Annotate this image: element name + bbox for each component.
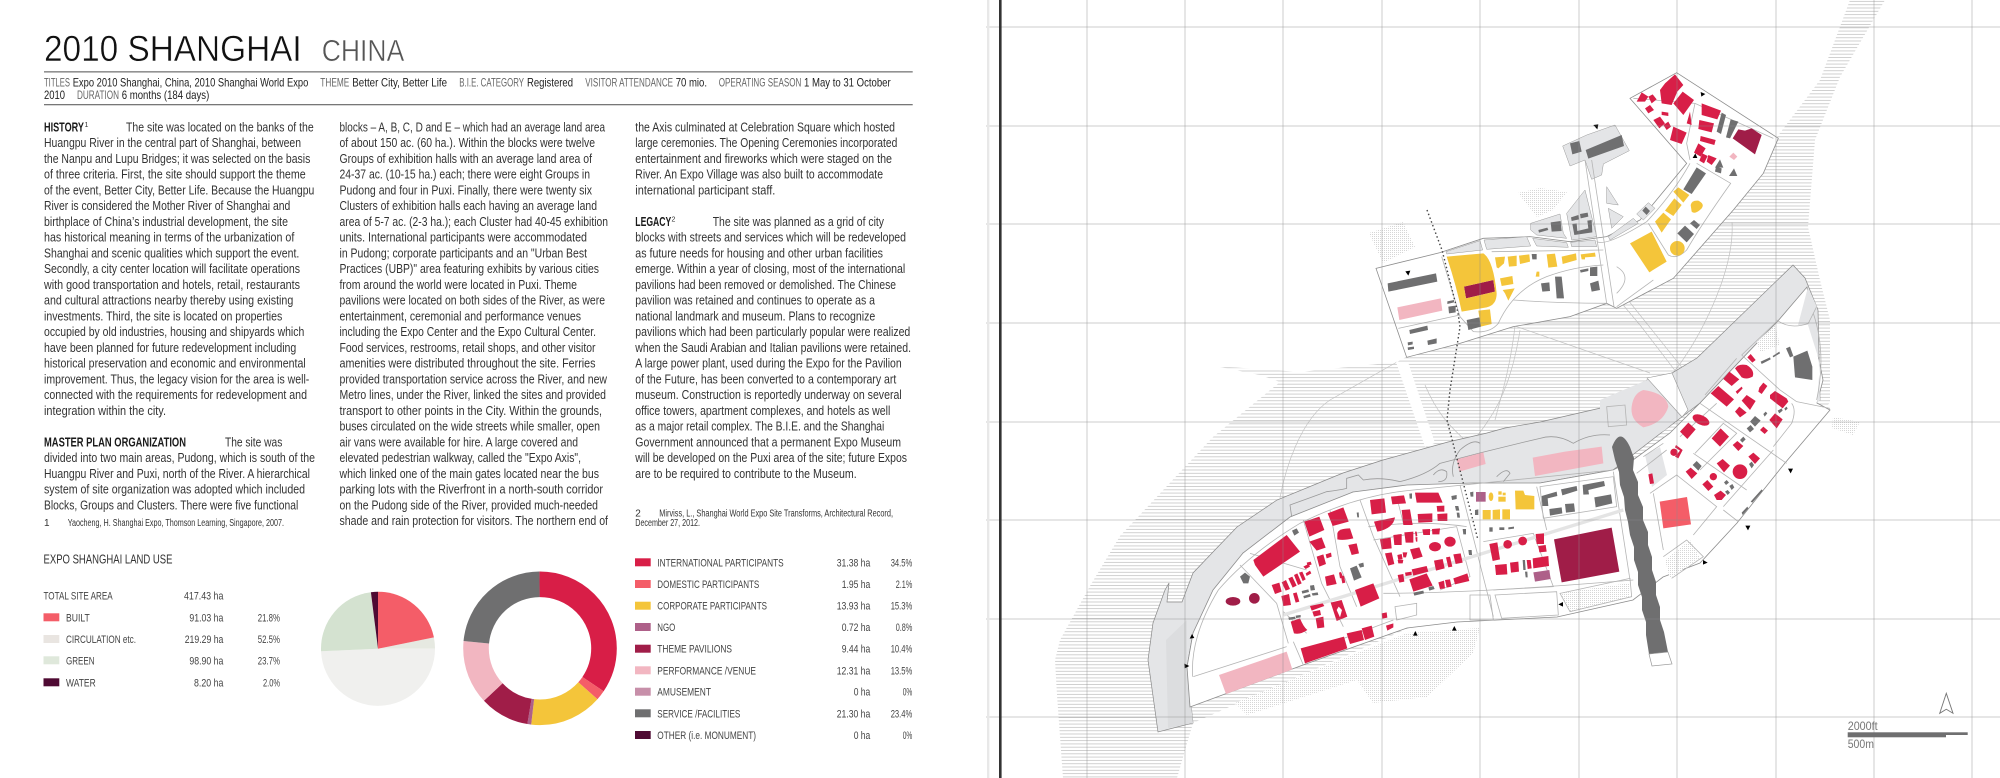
- legend row: theme pavilions: 10.4%: [891, 644, 913, 656]
- stipple on Pudong land: [1560, 325, 1780, 612]
- east red pavilions: [1648, 354, 1788, 500]
- land use table: 417.43 ha: [184, 591, 223, 603]
- text column 3: master plan end and legacy: will be developed on the Puxi area of the site; future Expos: [634, 451, 907, 465]
- text column 2: master plan continued: pavilions were located on both sides of the River, as were: [340, 294, 605, 308]
- text column 1: history and master plan organization: of three criteria. First, the site should support the theme: [44, 168, 306, 182]
- text column 2: master plan continued: area of 5-7 ac. (2-3 ha.); each Cluster had 40-45 exhibition: [340, 215, 608, 229]
- Puxi service buildings: [1388, 113, 1738, 350]
- row: green: 98.90 ha: [189, 655, 223, 667]
- text column 3: master plan end and legacy: LEGACY: [635, 215, 672, 229]
- row: circulation: 52.5%: [258, 634, 280, 646]
- legend row: theme pavilions: [635, 644, 913, 656]
- text column 2: master plan continued: Metro lines, under the River, linked the sites and provided: [340, 388, 606, 402]
- legend row: service facilities: 21.30 ha: [837, 708, 870, 720]
- text column 3: master plan end and legacy: national landmark and museum. Plans to recognize: [635, 309, 875, 323]
- Pudong west buildings: [1184, 435, 1633, 694]
- legend row: NGO: 0.72 ha: [842, 622, 870, 634]
- text column 3: master plan end and legacy: pavilions which had been particularly popular were realized: [635, 325, 910, 339]
- Puxi theme pavilions: [1464, 128, 1762, 298]
- text column 3: master plan end and legacy: the Axis culminated at Celebration Square which hosted: [635, 120, 895, 134]
- row: green: GREEN: [66, 655, 94, 667]
- text column 1: history and master plan organization: birthplace of China’s industrial development, the site: [44, 215, 288, 229]
- Expo Axis: [1612, 436, 1668, 654]
- metadata strip: 2010: [44, 89, 65, 102]
- text column 2: master plan continued: Groups of exhibition halls with an average land area of: [340, 152, 592, 166]
- Puxi gate arrows: [1405, 92, 1705, 276]
- legend row: amusement: 0 ha: [854, 687, 870, 699]
- heading: land use: EXPO SHANGHAI LAND USE: [44, 552, 172, 566]
- text column 1: history and master plan organization: has historical meaning in terms of the urbanization of: [44, 231, 295, 245]
- legend row: theme pavilions: 9.44 ha: [842, 644, 870, 656]
- grid lines: [986, 0, 2000, 778]
- text column 3: master plan end and legacy: 2: [672, 216, 676, 224]
- metadata strip: B.I.E. CATEGORY: [459, 77, 524, 90]
- dotted Expo axis line: [1427, 210, 1478, 540]
- Pudong land: [1187, 287, 1830, 707]
- legend row: other: [635, 730, 913, 742]
- text column 2: master plan continued: of about 150 ac. (60 ha.). Within the blocks were twelve: [340, 136, 595, 150]
- donut chart: built area breakdown: [476, 584, 604, 712]
- legend row: performance venue: 12.31 ha: [837, 665, 870, 677]
- text column 3: master plan end and legacy: large ceremonies. The Opening Ceremonies incorporated: [635, 136, 897, 150]
- metadata strip: TITLES: [44, 77, 70, 90]
- text column 2: master plan continued: [339, 120, 608, 528]
- metadata strip: VISITOR ATTENDANCE: [585, 77, 673, 90]
- text column 3: master plan end and legacy: international participant staff.: [635, 184, 775, 198]
- legend row: other: 0%: [903, 730, 913, 742]
- text column 3: master plan end and legacy: River. An Expo Village was also built to accommodate: [635, 168, 883, 182]
- scale bar: 500m: [1848, 737, 1874, 751]
- Puxi land and buildings: [1376, 73, 1778, 357]
- legend row: performance venue: PERFORMANCE /VENUE: [657, 665, 756, 677]
- text column 2: master plan continued: on the Pudong side of the River, provided much-needed: [340, 498, 598, 512]
- text column 2: master plan continued: blocks – A, B, C, D and E – which had an average land area: [340, 120, 605, 134]
- legend row: international: 34.5%: [891, 557, 913, 569]
- legend row: amusement: [635, 687, 913, 699]
- legend row: amusement: AMUSEMENT: [657, 687, 711, 699]
- river hatching: [1055, 0, 1885, 778]
- legend row: NGO: 0.8%: [896, 622, 913, 634]
- footnote 2: Mirviss, L., Shanghai World Expo Site Transforms, Architectural Record,: [659, 508, 893, 520]
- Puxi grey plots: [1446, 125, 1655, 254]
- legend row: corporate: [635, 601, 913, 613]
- text column 1: history and master plan organization: divided into two main areas, Pudong, which is south of the: [44, 451, 315, 465]
- legend row: service facilities: 23.4%: [891, 708, 913, 720]
- legend row: theme pavilions: THEME PAVILIONS: [657, 644, 732, 656]
- legend row: international: [635, 557, 913, 569]
- legend row: international: INTERNATIONAL PARTICIPANTS: [657, 557, 784, 569]
- title: 2010 Shanghai China: CHINA: [322, 34, 405, 68]
- text column 1: history and master plan organization: River is considered the Mother River of Shanghai and: [44, 199, 290, 213]
- legend row: corporate: 13.93 ha: [837, 601, 870, 613]
- row: green: 23.7%: [258, 655, 280, 667]
- scale bar: [1848, 719, 1968, 751]
- row: circulation: 219.29 ha: [185, 634, 223, 646]
- text column 2: master plan continued: 24-37 ac. (10-15 ha.) each; there were eight Groups in: [340, 168, 590, 182]
- text column 3: master plan end and legacy: of the Future, has been converted to a contemporary art: [635, 372, 897, 386]
- white notch pier: [1647, 373, 1688, 417]
- text column 3: master plan end and legacy: Government announced that a permanent Expo Museum: [635, 435, 901, 449]
- text column 1: history and master plan organization: 1: [84, 122, 88, 129]
- footnote 1: [44, 518, 284, 529]
- text column 2: master plan continued: elevated pedestrian walkway, called the "Expo Axis",: [340, 451, 581, 465]
- text column 2: master plan continued: which linked one of the main gates located near the bus: [339, 467, 599, 481]
- text column 1: history and master plan organization: integration within the city.: [44, 404, 166, 418]
- metadata strip: OPERATING SEASON: [719, 77, 801, 90]
- metadata strip: THEME: [320, 77, 349, 90]
- north arrow: [1940, 693, 1953, 713]
- text column 2: master plan continued: units. International participants were accommodated: [340, 231, 587, 245]
- east service buildings: [1693, 347, 1812, 515]
- UBP corporate pavilions: [1483, 491, 1534, 519]
- legend row: domestic: 2.1%: [896, 579, 913, 591]
- row: built: BUILT: [66, 612, 90, 624]
- text column 1: history and master plan organization: investments. Third, the site is located on properties: [44, 309, 282, 323]
- stipple zones: [1235, 188, 1860, 715]
- legend row: corporate: CORPORATE PARTICIPANTS: [657, 601, 767, 613]
- legend row: international: 31.38 ha: [837, 557, 870, 569]
- Puxi red pavilions: [1637, 74, 1721, 165]
- Pudong service buildings: [1240, 481, 1612, 620]
- Pudong east buildings: [1607, 307, 1830, 578]
- text column 3: master plan end and legacy: office towers, apartment complexes, and hotels as well: [635, 404, 890, 418]
- row: water: WATER: [66, 677, 96, 689]
- metadata strip: 1 May to 31 October: [804, 77, 891, 90]
- legend row: performance venue: [635, 665, 913, 677]
- river crossing strip: [1396, 362, 1435, 447]
- metadata strip: Registered: [527, 77, 573, 90]
- text column 3: master plan end and legacy: pavilion was retained and continues to operate as a: [635, 294, 875, 308]
- text column 1: history and master plan organization: Huangpu River in the central part of Shanghai, between: [44, 136, 301, 150]
- text column 1: history and master plan organization: The site was located on the banks of the: [126, 120, 314, 134]
- text column 1: history and master plan organization: MASTER PLAN ORGANIZATION: [44, 435, 186, 449]
- text column 3: master plan end and legacy: are to be required to contribute to the Museum.: [635, 467, 857, 481]
- text column 3: master plan end and legacy: The site was planned as a grid of city: [713, 215, 885, 229]
- pie chart: site land use: [321, 592, 435, 706]
- bridges and thin arcs in the river: [1280, 222, 1732, 498]
- text column 1: history and master plan organization: have been planned for future redevelopment including: [44, 341, 296, 355]
- land use table: TOTAL SITE AREA: [44, 591, 113, 603]
- text column 1: history and master plan organization: of the event, Better City, Better Life. Because the Huangpu: [44, 184, 314, 198]
- row: water: 8.20 ha: [194, 677, 223, 689]
- text column 2: master plan continued: provided transportation service across the River, and new: [340, 372, 608, 386]
- Puxi performance venues: [1397, 153, 1737, 320]
- text column 1: history and master plan organization: Secondly, a city center location will facilitate operations: [44, 262, 300, 276]
- text column 2: master plan continued: Pudong and four in Puxi. Finally, there were twenty six: [340, 184, 593, 198]
- legend row: domestic: DOMESTIC PARTICIPANTS: [657, 579, 759, 591]
- text column 1: history and master plan organization: connected with the requirements for redevelopment and: [44, 388, 307, 402]
- text column 3: master plan end and legacy: emerge. Within a year of closing, most of the international: [635, 262, 905, 276]
- east gate arrows: [1703, 469, 1793, 565]
- footnote 2: 2: [635, 508, 641, 520]
- text column 1: history and master plan organization: [43, 120, 315, 512]
- legend row: performance venue: 13.5%: [891, 665, 913, 677]
- text column 3: master plan end and legacy: pavilions had been removed or demolished. The Chinese: [635, 278, 896, 292]
- metadata strip: 70 mio.: [676, 77, 707, 90]
- Puxi land: [1376, 73, 1778, 357]
- Pudong riverside band: [1148, 265, 1820, 732]
- text column 1: history and master plan organization: The site was: [225, 435, 282, 449]
- text column 3: master plan end and legacy: when the Saudi Arabian and Italian pavilions were retained.: [634, 341, 911, 355]
- text column 1: history and master plan organization: system of site organization was adopted which included: [44, 482, 305, 496]
- text column 1: history and master plan organization: with good transportation and hotels, retail, restaurants: [43, 278, 300, 292]
- footnote 2: [635, 508, 893, 529]
- text column 2: master plan continued: entertainment, ceremonial and performance venues: [340, 309, 581, 323]
- legend row: NGO: [635, 622, 913, 634]
- legend row: other: OTHER (i.e. MONUMENT): [657, 730, 756, 742]
- row: circulation: CIRCULATION etc.: [66, 634, 136, 646]
- legend row: service facilities: [635, 708, 913, 720]
- legend row: service facilities: SERVICE /FACILITIES: [657, 708, 740, 720]
- legend row: domestic: [635, 579, 913, 591]
- text column 3: master plan end and legacy: A large power plant, used during the Expo for the Pavilion: [635, 357, 902, 371]
- text column 3: master plan end and legacy: as future needs for housing and other urban facilities: [635, 246, 883, 260]
- text column 3: master plan end and legacy: [634, 120, 911, 481]
- text column 2: master plan continued: including the Expo Center and the Expo Cultural Center.: [340, 325, 596, 339]
- text column 3: master plan end and legacy: as a major retail complex. The B.I.E. and the Shanghai: [635, 420, 884, 434]
- text column 2: master plan continued: buses circulated on the wide streets while smaller, open: [340, 420, 600, 434]
- metadata strip: 6 months (184 days): [122, 89, 209, 102]
- footnote 1: Yaocheng, H. Shanghai Expo, Thomson Learning, Singapore, 2007.: [68, 518, 284, 529]
- metadata strip: [44, 71, 913, 105]
- text column 1: history and master plan organization: Blocks, Groups and Clusters. There were five functional: [44, 498, 298, 512]
- scale bar: 2000ft: [1848, 719, 1878, 733]
- text column 1: history and master plan organization: and cultural attractions nearby thereby using existing: [44, 294, 293, 308]
- text column 1: history and master plan organization: HISTORY: [44, 120, 84, 134]
- text column 2: master plan continued: transport to other points in the City. Within the grounds,: [340, 404, 602, 418]
- land use table: [44, 591, 280, 689]
- text column 3: master plan end and legacy: museum. Construction is reportedly underway on several: [635, 388, 902, 402]
- metadata strip: Expo 2010 Shanghai, China, 2010 Shanghai World Expo: [73, 77, 308, 90]
- legend row: NGO: NGO: [657, 622, 675, 634]
- row: water: 2.0%: [263, 677, 280, 689]
- text column 2: master plan continued: in Pudong; corporate participants and an "Urban Best: [340, 246, 587, 260]
- legend row: domestic: 1.95 ha: [842, 579, 870, 591]
- Puxi road lines: [1398, 98, 1773, 332]
- row: built: 21.8%: [258, 612, 280, 624]
- text column 2: master plan continued: Food services, restrooms, retail shops, and other visitor: [340, 341, 596, 355]
- boulevard stipple: [1283, 510, 1623, 615]
- legend row: other: 0 ha: [854, 730, 870, 742]
- footnote 1: 1: [44, 518, 50, 529]
- Pudong performance venues: [1219, 447, 1603, 694]
- title: 2010 Shanghai China: 2010 SHANGHAI: [44, 28, 302, 69]
- east grey wedges: [1600, 287, 1820, 487]
- metadata strip: Better City, Better Life: [352, 77, 447, 90]
- text column 2: master plan continued: air vans were available for hire. A large covered and: [340, 435, 578, 449]
- darker stipple on band: [1166, 620, 1193, 728]
- text column 2: master plan continued: Clusters of exhibition halls each having an average land: [340, 199, 597, 213]
- axis pier: [1649, 652, 1672, 666]
- domestic pavilion: [1660, 497, 1691, 528]
- text column 1: history and master plan organization: improvement. Thus, the legacy vision for the area is well-: [44, 372, 309, 386]
- text column 1: history and master plan organization: the Nanpu and Lupu Bridges; it was selected on the basis: [44, 152, 310, 166]
- text column 1: history and master plan organization: occupied by old industries, housing and shipyards which: [44, 325, 304, 339]
- text column 2: master plan continued: parking lots with the Riverfront in a north-south corridor: [340, 482, 603, 496]
- text column 1: history and master plan organization: Shanghai and scenic qualities which support the event.: [44, 246, 299, 260]
- donut legend: [635, 557, 913, 742]
- row: circulation: [44, 634, 280, 646]
- Pudong red pavilions: [1253, 493, 1549, 663]
- row: built: 91.03 ha: [189, 612, 223, 624]
- footnote 2: December 27, 2012.: [635, 518, 700, 529]
- text column 3: master plan end and legacy: blocks with streets and services which will be redeveloped: [635, 231, 906, 245]
- text column 2: master plan continued: shade and rain protection for visitors. The northern end of: [340, 514, 608, 528]
- site plan map: [986, 0, 2000, 778]
- band road line: [1290, 435, 1610, 517]
- page gutter lines: [987, 0, 1002, 778]
- text column 2: master plan continued: amenities were distributed throughout the site. Ferries: [340, 357, 596, 371]
- metadata strip: DURATION: [77, 89, 119, 102]
- row: built: [44, 612, 280, 624]
- legend row: corporate: 15.3%: [891, 601, 913, 613]
- Pudong theme pavilions: [1226, 528, 1619, 606]
- text column 3: master plan end and legacy: entertainment and fireworks which were staged on the: [635, 152, 892, 166]
- Puxi corporate pavilions: [1447, 187, 1703, 327]
- text column 2: master plan continued: from around the world were located in Puxi. Theme: [340, 278, 577, 292]
- NGO pavilions: [1476, 492, 1551, 582]
- text column 1: history and master plan organization: Huangpu River and Puxi, north of the River. A hierarchical: [44, 467, 310, 481]
- Pudong gate arrows: [1184, 602, 1563, 668]
- text column 2: master plan continued: Practices (UBP)" area featuring exhibits by various cities: [340, 262, 599, 276]
- text column 1: history and master plan organization: historical preservation and economic and environmental: [44, 357, 306, 371]
- block outlines: [1192, 470, 1633, 677]
- row: water: [44, 677, 280, 689]
- row: green: [44, 655, 280, 667]
- legend row: amusement: 0%: [903, 687, 913, 699]
- road lines: [1607, 307, 1830, 578]
- performance oval: [1631, 390, 1668, 427]
